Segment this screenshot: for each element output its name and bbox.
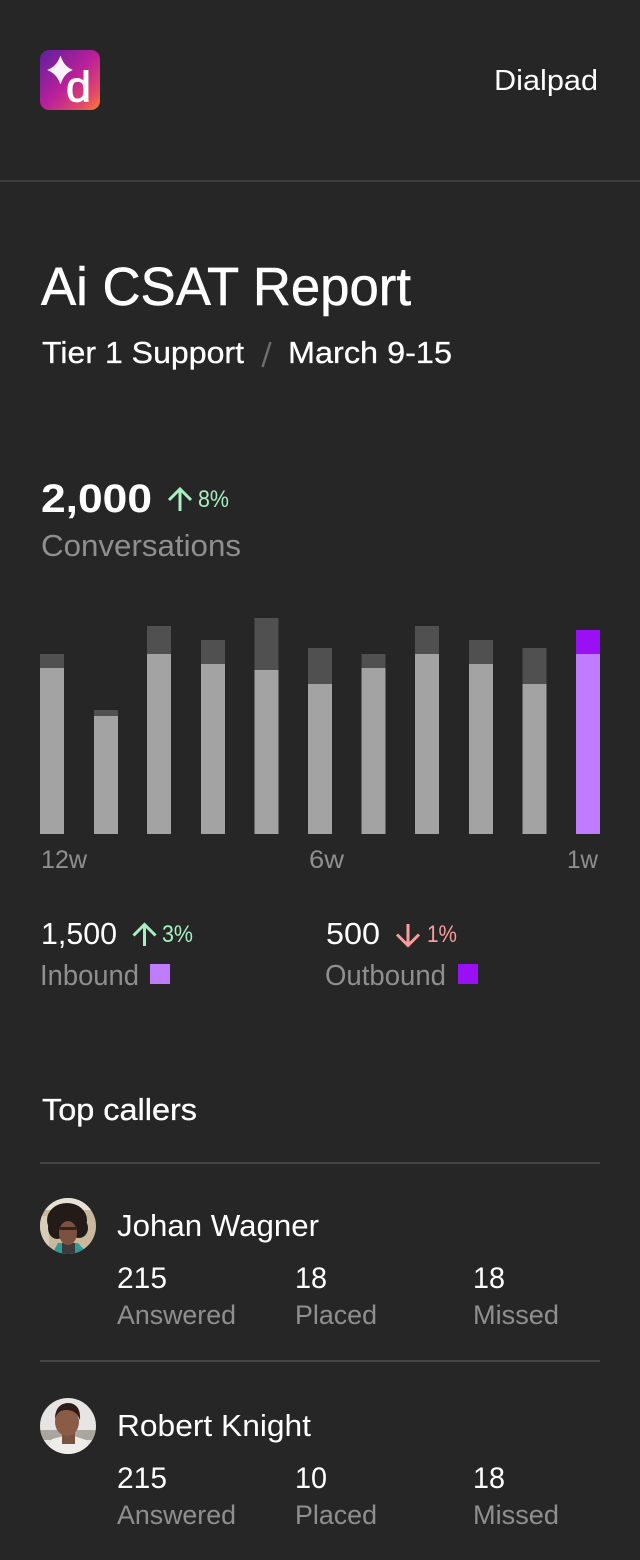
header: logo and brand bbox=[40, 50, 598, 112]
caller row: Robert Knight: Answered bbox=[117, 1500, 236, 1530]
stat: inbound: 1,500 bbox=[41, 916, 117, 951]
bar chart: weekly conversations bbox=[40, 618, 600, 874]
icon: up arrow bbox=[134, 924, 156, 946]
caller row: Johan Wagner: Answered bbox=[117, 1300, 236, 1330]
caller row: Robert Knight: Placed bbox=[295, 1500, 377, 1530]
legend swatch: inbound bbox=[150, 964, 170, 984]
caller row: Johan Wagner: 18 bbox=[295, 1262, 327, 1295]
icon: Dialpad logo: d bbox=[66, 64, 91, 112]
stat: conversations total: 2,000 bbox=[41, 477, 152, 521]
stat: outbound: Outbound bbox=[325, 960, 446, 992]
axis labels: 12w bbox=[41, 846, 88, 874]
caller row: Johan Wagner: Placed bbox=[295, 1300, 377, 1330]
avatar: Johan Wagner bbox=[40, 1198, 96, 1254]
caller row: Robert Knight: 215 bbox=[117, 1462, 167, 1495]
caller row: Robert Knight: Missed bbox=[473, 1500, 559, 1530]
icon: Dialpad logo bbox=[40, 50, 100, 112]
caller row: Robert Knight: Robert Knight bbox=[117, 1408, 311, 1443]
caller row: Johan Wagner bbox=[40, 1198, 559, 1330]
caller row: Johan Wagner: 18 bbox=[473, 1262, 505, 1295]
axis labels bbox=[41, 846, 599, 874]
brand name: Dialpad bbox=[494, 65, 598, 97]
stat: conversations total: Conversations bbox=[41, 528, 241, 563]
stat: conversations total bbox=[41, 477, 241, 563]
icon: up arrow bbox=[169, 489, 191, 511]
stat: outbound bbox=[325, 916, 478, 992]
heading: top callers: Top callers bbox=[42, 1092, 197, 1127]
subtitle: March 9-15 bbox=[288, 335, 452, 370]
subtitle bbox=[42, 335, 452, 370]
stat: inbound bbox=[40, 916, 193, 992]
stat: outbound: 500 bbox=[326, 916, 380, 951]
avatar: Robert Knight bbox=[40, 1398, 96, 1454]
caller row: Robert Knight: 18 bbox=[473, 1462, 505, 1495]
subtitle: Tier 1 Support bbox=[42, 335, 244, 370]
stat: inbound: Inbound bbox=[40, 960, 139, 992]
caller row: Johan Wagner: Missed bbox=[473, 1300, 559, 1330]
axis labels: 1w bbox=[567, 846, 599, 874]
caller row: Robert Knight: 10 bbox=[295, 1462, 327, 1495]
title: Ai CSAT Report bbox=[41, 257, 411, 317]
stat: inbound: 3% bbox=[162, 921, 193, 948]
axis labels: 6w bbox=[309, 846, 345, 874]
legend swatch: outbound bbox=[458, 964, 478, 984]
icon: down arrow bbox=[397, 924, 419, 946]
stat: outbound: 1% bbox=[427, 921, 457, 948]
caller row: Johan Wagner: 215 bbox=[117, 1262, 167, 1295]
caller row: Johan Wagner: Johan Wagner bbox=[117, 1208, 319, 1243]
caller row: Robert Knight bbox=[40, 1398, 559, 1530]
stat: conversations total: 8% bbox=[198, 486, 229, 513]
